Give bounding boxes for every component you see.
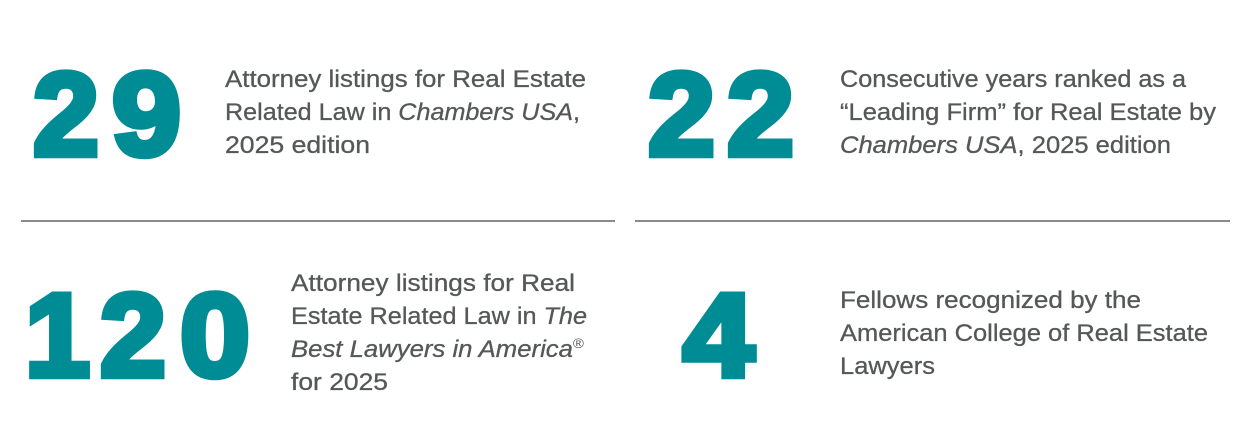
text: 120 description: for 2025 <box>291 369 388 396</box>
text: 4 description: American College of Real Estate <box>840 320 1208 347</box>
text: 4 description <box>840 287 1208 380</box>
text: 29 description: Related Law in Chambers USA , <box>225 99 580 126</box>
text: 29 description <box>225 66 586 159</box>
panel: 120 attorney listings in Best Lawyers <box>25 270 587 402</box>
number: 4: 4 <box>683 270 754 402</box>
number: 120: 1 <box>25 270 90 402</box>
text: 29 description: Attorney listings for Real Estate <box>225 66 586 93</box>
number: 22: 2 <box>727 49 794 181</box>
divider: right <box>635 220 1230 222</box>
panel: 4 fellows <box>683 270 1208 402</box>
text: 22 description <box>840 66 1216 159</box>
number: 22: 2 <box>648 49 715 181</box>
text: 22 description: Consecutive years ranked as a <box>840 66 1187 93</box>
text: 120 description: Estate Related Law in The <box>291 303 587 330</box>
number: 120: 0 <box>180 270 250 402</box>
text: 29 description: 2025 edition <box>225 132 370 159</box>
text: 120 description: Best Lawyers in America <box>291 336 573 363</box>
text: 22 description: Chambers USA , 2025 edition <box>840 132 1171 159</box>
panel: 29 attorney listings in Chambers USA <box>33 49 586 181</box>
text: 22 description: “Leading Firm” for Real Estate by <box>840 99 1216 126</box>
text: 4 description: Fellows recognized by the <box>840 287 1141 314</box>
text: 120 description: ® <box>573 335 585 351</box>
text: 120 description: Attorney listings for Real <box>291 270 575 297</box>
text: 120 description <box>291 270 587 396</box>
number: 29: 2 <box>33 49 99 181</box>
number: 120 <box>25 270 250 402</box>
panel: 22 consecutive years ranked <box>648 49 1216 181</box>
number: 29: 9 <box>112 49 181 181</box>
number: 120: 2 <box>100 270 166 402</box>
divider: left <box>21 220 615 222</box>
text: 4 description: Lawyers <box>840 353 935 380</box>
number: 22 <box>648 49 794 181</box>
number: 29 <box>33 49 181 181</box>
